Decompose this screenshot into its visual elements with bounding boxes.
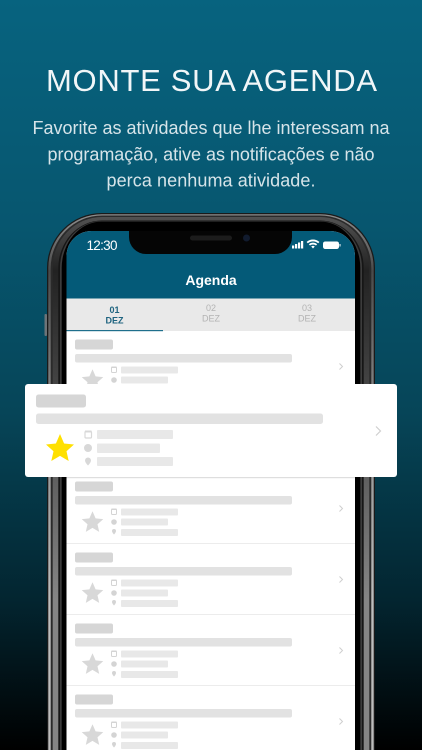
side button [44, 314, 47, 336]
status time: 12:30 [86, 238, 118, 253]
app title: Agenda [185, 272, 237, 288]
icon: yellow star [46, 434, 74, 461]
app header [66, 231, 355, 298]
tab: 01 DEZ: 01 [109, 305, 120, 315]
tab: 02 DEZ: 02 [206, 303, 216, 313]
icon: clock [84, 444, 92, 452]
tab: 03 DEZ: 03 [302, 303, 312, 313]
card tag [36, 394, 86, 408]
notch [129, 231, 292, 254]
icon: calendar [85, 430, 92, 438]
camera [243, 234, 250, 242]
tab: 02 DEZ: DEZ [202, 314, 221, 324]
list item 2 [75, 482, 342, 536]
phone frame [47, 213, 375, 750]
card title bar [36, 414, 323, 424]
card detail bars [97, 430, 173, 466]
status icons [292, 240, 340, 249]
subtitle [32, 118, 390, 190]
subtitle: Favorite as atividades que lhe interessam na [32, 118, 390, 138]
list item 1 [75, 340, 342, 394]
phone [44, 213, 375, 750]
list item 4 [75, 624, 342, 678]
screen [66, 231, 355, 750]
tab: 03 DEZ [298, 303, 317, 324]
icon: chevron [376, 426, 380, 436]
row separators [66, 543, 355, 686]
icon: location pin [85, 458, 91, 466]
tab: 01 DEZ: DEZ [106, 316, 124, 326]
subtitle: perca nenhuma atividade. [106, 170, 316, 190]
list item 3 [75, 552, 342, 607]
title: MONTE SUA AGENDA [46, 63, 377, 98]
tab: 02 DEZ [202, 303, 221, 324]
subtitle: programação, ative as notificações e não [48, 144, 374, 164]
tab: 03 DEZ: DEZ [298, 314, 317, 324]
highlighted card [25, 384, 397, 478]
active tab underline [66, 330, 163, 331]
tab: 01 DEZ [106, 305, 124, 326]
list item 5 [75, 694, 342, 749]
speaker [190, 236, 232, 240]
date tabs [66, 298, 355, 331]
